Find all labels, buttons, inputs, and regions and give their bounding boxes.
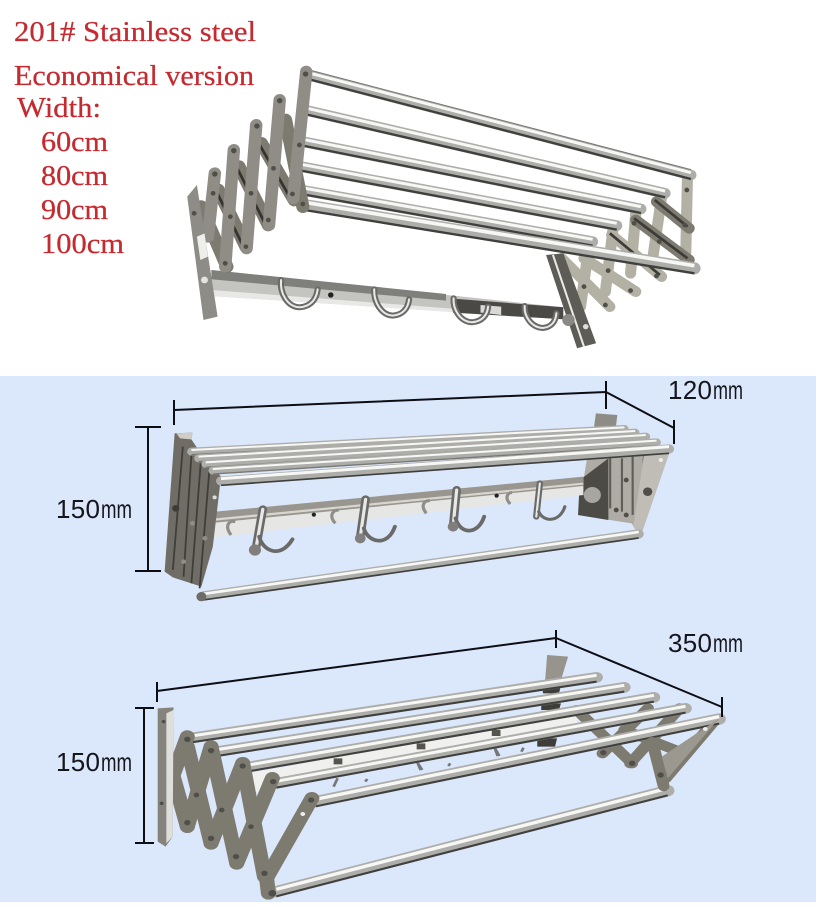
drying tubes xyxy=(189,675,719,896)
label: 120mm: mm xyxy=(713,375,743,405)
dimension: lower rack width xyxy=(157,630,556,702)
label: 150mm lower xyxy=(56,747,132,777)
panel: blue background xyxy=(0,376,816,902)
right scissor arms xyxy=(562,175,689,307)
label: 350mm: mm xyxy=(713,628,743,658)
left scissor arms xyxy=(168,737,314,897)
label: 120mm: 120 xyxy=(668,375,712,405)
heading: material and version list: 60cm xyxy=(41,127,108,158)
hook bar xyxy=(211,270,563,319)
product photo: extended rack, top view xyxy=(187,70,694,348)
label: 350mm xyxy=(668,628,743,658)
back rail xyxy=(249,713,577,793)
heading: material and version list: 100cm xyxy=(41,229,124,260)
heading: material and version list: 90cm xyxy=(41,195,108,226)
back bracket xyxy=(537,655,575,747)
right wall plate xyxy=(546,253,596,348)
product photo: extended rack, lower view xyxy=(158,655,719,897)
left wall plate xyxy=(158,707,173,847)
heading: material and version list: Economical version xyxy=(14,61,254,92)
left wall plate xyxy=(187,185,218,320)
dimension: lower rack height xyxy=(135,708,154,843)
product photo: folded rack with hooks xyxy=(165,413,671,601)
dimension: lower rack depth xyxy=(556,638,722,717)
drying tubes xyxy=(301,70,694,273)
label: 120mm xyxy=(668,375,743,405)
label: 150mm upper: mm xyxy=(101,494,132,524)
left scissor arms xyxy=(201,71,308,267)
folded drying tubes xyxy=(191,427,669,485)
hooks xyxy=(249,483,565,556)
label: 150mm upper: 150 xyxy=(56,494,100,524)
right scissor arms xyxy=(577,708,715,787)
label: 150mm upper xyxy=(56,494,132,524)
heading: material and version list: Width: xyxy=(17,93,101,124)
label: 150mm lower: 150 xyxy=(56,747,100,777)
left folded plates xyxy=(165,433,221,588)
right bracket and plates xyxy=(578,413,671,537)
heading: material and version list: 201# Stainless steel xyxy=(14,17,256,48)
dimension: top rack width xyxy=(174,381,606,425)
hooks xyxy=(281,280,556,328)
hook bar xyxy=(214,477,583,537)
dimension: top rack depth xyxy=(606,392,674,444)
right end plates xyxy=(652,718,719,787)
heading: material and version list: 80cm xyxy=(41,161,108,192)
heading: material and version list xyxy=(14,17,256,260)
lower tube xyxy=(196,532,639,601)
dimension: top rack height xyxy=(135,427,161,571)
label: 150mm lower: mm xyxy=(101,747,132,777)
label: 350mm: 350 xyxy=(668,628,712,658)
